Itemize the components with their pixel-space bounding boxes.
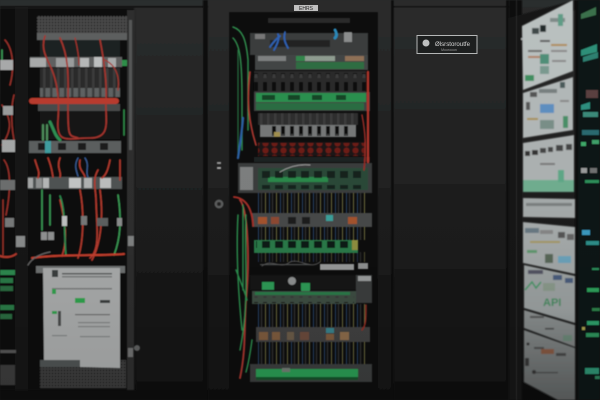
row: green and grey unit xyxy=(252,291,356,304)
panel: left rack opening xyxy=(0,8,140,390)
wires: centre green, blue, red and yellow xyxy=(233,27,368,378)
document sheet 8 xyxy=(524,330,575,400)
row: bright green panel xyxy=(254,92,370,111)
panel: left cabinet door xyxy=(0,0,210,400)
row: bottom green panel xyxy=(250,364,372,382)
dimming overlay xyxy=(522,200,576,400)
panel: wall of wall-mounted documents xyxy=(522,0,576,400)
rack row: slanted grey terminals xyxy=(38,88,120,139)
row: white connectors xyxy=(260,263,368,270)
far-left green rack rows xyxy=(0,270,16,385)
bottom mesh vent xyxy=(40,360,126,388)
row: green patch panel xyxy=(254,240,358,253)
document sheet 7 xyxy=(524,310,575,347)
document sheet 6 with API xyxy=(524,265,575,323)
sign plate: Moorooon xyxy=(441,48,457,52)
row: grey and white ports xyxy=(258,113,358,137)
document sheet 6 with API: API xyxy=(543,297,561,309)
label: centre door tag: EHRS xyxy=(299,6,314,12)
top frame xyxy=(0,0,600,8)
far-left rack blocks xyxy=(0,60,140,357)
wire field behind the rows xyxy=(256,193,368,364)
row: copper and grey patch panel xyxy=(252,213,372,227)
row: dark unit with green lamps xyxy=(250,275,372,303)
document sheet 4 xyxy=(523,198,575,218)
rack row: white modules xyxy=(30,40,127,88)
row: red connectors xyxy=(254,142,370,162)
rack row: white terminal blocks xyxy=(28,177,122,189)
row: dark sockets xyxy=(254,71,366,92)
sign plate xyxy=(417,36,477,54)
panel: right inner frame xyxy=(509,0,600,400)
panel: centre cabinet door xyxy=(208,0,394,400)
top mesh vent xyxy=(37,16,127,40)
row: green and grey switch xyxy=(238,163,372,193)
document sheet 1 xyxy=(522,0,573,90)
sign plate: Ølsrstoroutfe xyxy=(435,41,470,48)
document sheet 3 xyxy=(523,135,574,192)
icon: door lock xyxy=(214,162,224,208)
row: top bracket xyxy=(250,18,368,55)
panel: far-right rack LEDs xyxy=(578,0,600,400)
rack row: grey sockets xyxy=(29,141,121,153)
row: copper grey panel xyxy=(256,327,370,342)
label: centre door tag xyxy=(294,5,318,12)
wires: left rack red, green and blue xyxy=(0,36,124,265)
document sheet 2 xyxy=(523,77,573,138)
document sheet 5 xyxy=(523,222,575,274)
panel: right cabinet door xyxy=(394,0,509,400)
row: white and green panel xyxy=(255,55,368,70)
document on left rack xyxy=(36,266,125,368)
rack equipment: centre xyxy=(233,18,372,382)
